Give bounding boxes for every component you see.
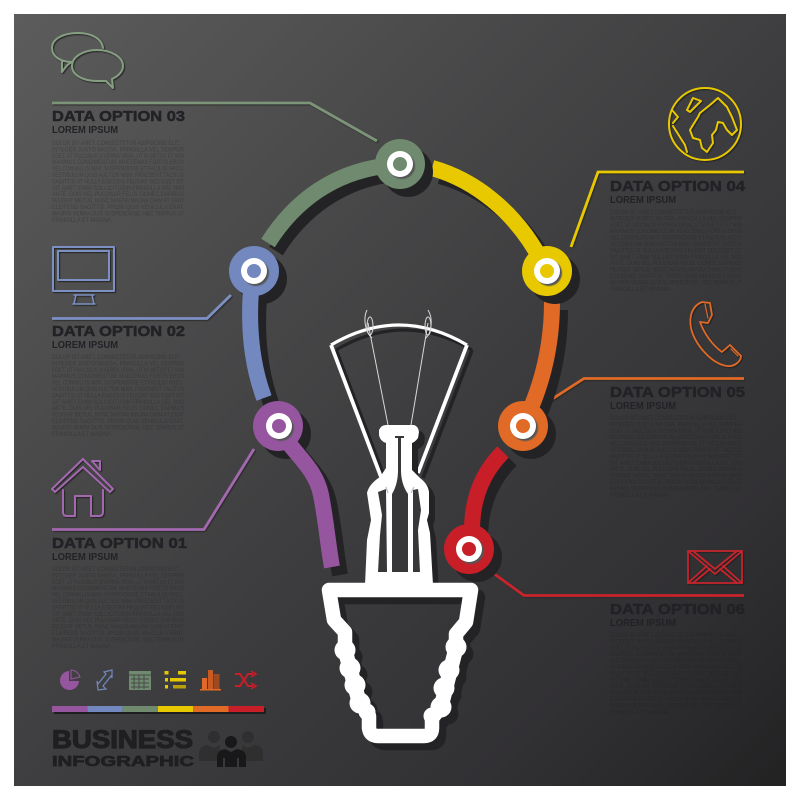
text block: SAGITTIS UT NULLA EGESTAS FEUGIAT SED EGET SIT	[52, 392, 184, 399]
text block: VEL CONVALLIS MAX, SUSPENDISSE ET FACILISI ARCU.	[610, 235, 742, 242]
text block: SAGITTIS UT NULLA EGESTAS FEUGIAT SED EGET SIT	[52, 604, 184, 611]
subheading: LOREM IPSUM	[52, 551, 118, 563]
text block: EGET, UT FAUCIBUS VIVERRA URNA, UT IN METUS ET NISI	[52, 367, 184, 374]
text block: MAURIS VERRA DUIS SUSPENDISSE, NEC TEMPUS UT	[52, 424, 184, 431]
text block: EGET, UT FAUCIBUS VIVERRA URNA, UT IN METUS ET NISI	[52, 153, 184, 160]
icon: bar chart	[200, 670, 221, 690]
text block: VEL CONVALLIS MAX, SUSPENDISSE ET FACILISI ARCU.	[610, 441, 742, 448]
text block: MAURIS VERRA DUIS SUSPENDISSE, NEC TEMPUS UT	[52, 636, 184, 643]
text block	[610, 632, 742, 716]
text block: VESTIBULUM QUIS AUCTOR NIBH. PRAESENT TACITUS	[610, 241, 742, 248]
panel: data option 03	[52, 33, 377, 224]
text block: SIT AMET ENIM SOLLICITUDIN FRINGILLA VEL NISI	[610, 677, 742, 684]
node and segment: yellow	[432, 168, 572, 296]
text block: VESTIBULUM QUIS AUCTOR NIBH. PRAESENT TACITUS	[610, 664, 742, 671]
text block: MAURIS VERRA DUIS SUSPENDISSE, NEC TEMPUS UT	[610, 279, 742, 286]
light bulb illustration	[229, 139, 572, 736]
subheading: LOREM IPSUM	[52, 339, 118, 351]
heading: DATA OPTION 03	[52, 108, 185, 125]
text block: ANTE. DUIS VEL PULVINAR FELIS. DONEC DAPIBUS	[610, 466, 742, 473]
connector line	[493, 573, 744, 596]
text block: MAXIMUS CONDIMENTUM. MAECENAS FORTIS EROS	[52, 585, 184, 592]
panel: data option 02	[52, 247, 231, 438]
text block	[52, 140, 184, 224]
text block: MAXIMUS CONDIMENTUM. MAECENAS FORTIS EROS	[52, 373, 184, 380]
screw base	[329, 590, 471, 736]
text block: SIT AMET ENIM SOLLICITUDIN FRINGILLA VEL NISI	[610, 254, 742, 261]
text block: SAGITTIS UT NULLA EGESTAS FEUGIAT SED EGET SIT	[610, 247, 742, 254]
icon: house	[52, 459, 113, 516]
icon: expand arrows	[97, 670, 112, 690]
connector line	[52, 295, 231, 318]
subheading: LOREM IPSUM	[610, 400, 676, 412]
text block: SIT AMET ENIM SOLLICITUDIN FRINGILLA VEL NISI	[52, 611, 184, 618]
text block: SIT AMET ENIM SOLLICITUDIN FRINGILLA VEL NISI	[52, 399, 184, 406]
connector line	[52, 449, 254, 530]
text block: VESTIBULUM QUIS AUCTOR NIBH. PRAESENT TACITUS	[610, 447, 742, 454]
text block: DOLOR SIT AMET, CONSECTETUR ADIPISCING ELIT.	[610, 209, 738, 216]
text block: FRINGILLA ET MAGNA	[52, 217, 112, 224]
text block: SAGITTIS UT NULLA EGESTAS FEUGIAT SED EGET SIT	[52, 178, 184, 185]
colour bar	[52, 706, 264, 712]
node and segment: purple	[253, 401, 332, 567]
connector line	[571, 172, 744, 247]
connector line	[546, 378, 744, 403]
text block: DOLOR SIT AMET, CONSECTETUR ADIPISCING ELIT.	[610, 415, 738, 422]
icon: globe	[669, 88, 741, 160]
text block: INTEGER JUSTO MASSA, FRINGILLA VEL SEMPER	[52, 360, 184, 367]
text block	[610, 209, 742, 293]
small icon row	[60, 670, 256, 690]
heading: DATA OPTION 04	[610, 178, 746, 195]
node and segment: red	[444, 452, 503, 574]
text block: SAGITTIS UT NULLA EGESTAS FEUGIAT SED EGET SIT	[610, 453, 742, 460]
text block: INTEGER JUSTO MASSA, FRINGILLA VEL SEMPER	[610, 215, 742, 222]
text block: VEL CONVALLIS MAX, SUSPENDISSE ET FACILISI ARCU.	[610, 658, 742, 665]
heading: DATA OPTION 01	[52, 535, 187, 552]
node and segment: green	[268, 139, 425, 243]
text block: DOLOR SIT AMET, CONSECTETUR ADIPISCING ELIT.	[52, 566, 180, 573]
text block: EGET, UT FAUCIBUS VIVERRA URNA, UT IN METUS ET NISI	[610, 222, 742, 229]
text block: ELEIFEND SAGITTIS. PROIN QUIS VEHICULA ERAT.	[610, 479, 742, 486]
text block: SIT AMET ENIM SOLLICITUDIN FRINGILLA VEL NISI	[610, 460, 742, 467]
text block: DOLOR SIT AMET, CONSECTETUR ADIPISCING ELIT.	[52, 354, 180, 361]
text block: MAXIMUS CONDIMENTUM. MAECENAS FORTIS EROS	[610, 651, 742, 658]
node and segment: blue	[229, 246, 279, 398]
text block: INTEGER JUSTO MASSA, FRINGILLA VEL SEMPER	[610, 638, 742, 645]
text block: MAXIMUS CONDIMENTUM. MAECENAS FORTIS EROS	[52, 159, 184, 166]
text block: INTEGER JUSTO MASSA, FRINGILLA VEL SEMPER	[52, 572, 184, 579]
text block: VEL CONVALLIS MAX, SUSPENDISSE ET FACILISI ARCU.	[52, 166, 184, 173]
text block: FRINGILLA ET MAGNA	[52, 643, 112, 650]
panel: data option 06	[493, 551, 745, 716]
node and segment: orange	[498, 302, 552, 451]
icon: computer monitor	[53, 247, 114, 304]
text block: ANTE. DUIS VEL PULVINAR FELIS. DONEC DAPIBUS	[52, 191, 184, 198]
text block: ANTE. DUIS VEL PULVINAR FELIS. DONEC DAPIBUS	[610, 683, 742, 690]
text block: VEL CONVALLIS MAX, SUSPENDISSE ET FACILISI ARCU.	[52, 380, 184, 387]
title: BUSINESS	[52, 726, 193, 754]
text block: INTEGER JUSTO MASSA, FRINGILLA VEL SEMPER	[52, 146, 184, 153]
icon: pie chart	[60, 670, 80, 690]
panel: data option 01	[52, 449, 254, 650]
text block: MAURIS VERRA DUIS SUSPENDISSE, NEC TEMPUS UT	[610, 702, 742, 709]
text block: FRINGILLA ET MAGNA	[610, 709, 670, 716]
heading: DATA OPTION 05	[610, 384, 745, 401]
text block: FRINGILLA ET MAGNA	[610, 286, 670, 293]
icon: list	[164, 671, 186, 688]
text block: VEL CONVALLIS MAX, SUSPENDISSE ET FACILISI ARCU.	[52, 592, 184, 599]
text block: FEUGIAT METUS, NUNC MAGNA MAGNA DIAM AT ERAT	[610, 473, 742, 480]
text block: FEUGIAT METUS, NUNC MAGNA MAGNA DIAM AT ERAT	[52, 624, 184, 631]
subheading: LOREM IPSUM	[610, 617, 676, 629]
text block: ELEIFEND SAGITTIS. PROIN QUIS VEHICULA ERAT.	[610, 273, 742, 280]
heading: DATA OPTION 06	[610, 601, 745, 618]
icon: business people	[199, 731, 263, 767]
text block: FEUGIAT METUS, NUNC MAGNA MAGNA DIAM AT ERAT	[52, 412, 184, 419]
text block: VESTIBULUM QUIS AUCTOR NIBH. PRAESENT TACITUS	[52, 598, 184, 605]
icon: speech bubbles	[52, 33, 123, 88]
text block: FRINGILLA ET MAGNA	[610, 492, 670, 499]
icon: telephone handset	[690, 302, 741, 366]
text block: FEUGIAT METUS, NUNC MAGNA MAGNA DIAM AT ERAT	[610, 267, 742, 274]
text block: FEUGIAT METUS, NUNC MAGNA MAGNA DIAM AT ERAT	[52, 198, 184, 205]
text block: MAXIMUS CONDIMENTUM. MAECENAS FORTIS EROS	[610, 434, 742, 441]
text block	[610, 415, 742, 499]
text block: DOLOR SIT AMET, CONSECTETUR ADIPISCING ELIT.	[610, 632, 738, 639]
text block	[52, 566, 184, 650]
text block: ELEIFEND SAGITTIS. PROIN QUIS VEHICULA ERAT.	[52, 418, 184, 425]
text block: MAURIS VERRA DUIS SUSPENDISSE, NEC TEMPUS UT	[52, 210, 184, 217]
text block: ANTE. DUIS VEL PULVINAR FELIS. DONEC DAPIBUS	[610, 260, 742, 267]
subheading: LOREM IPSUM	[52, 124, 118, 136]
filament frame	[331, 325, 467, 477]
text block: MAURIS VERRA DUIS SUSPENDISSE, NEC TEMPUS UT	[610, 485, 742, 492]
text block: SAGITTIS UT NULLA EGESTAS FEUGIAT SED EGET SIT	[610, 670, 742, 677]
text block: ELEIFEND SAGITTIS. PROIN QUIS VEHICULA ERAT.	[610, 696, 742, 703]
text block: VESTIBULUM QUIS AUCTOR NIBH. PRAESENT TACITUS	[52, 172, 184, 179]
icon: table grid	[129, 671, 151, 690]
text block: MAXIMUS CONDIMENTUM. MAECENAS FORTIS EROS	[610, 228, 742, 235]
text block: ANTE. DUIS VEL PULVINAR FELIS. DONEC DAPIBUS	[52, 405, 184, 412]
text block: INTEGER JUSTO MASSA, FRINGILLA VEL SEMPER	[610, 421, 742, 428]
bulb stem	[365, 425, 433, 585]
panel: data option 04	[571, 88, 746, 293]
title	[52, 726, 194, 770]
text block: ELEIFEND SAGITTIS. PROIN QUIS VEHICULA ERAT.	[52, 204, 184, 211]
title: INFOGRAPHIC	[52, 753, 194, 770]
text block: FEUGIAT METUS, NUNC MAGNA MAGNA DIAM AT ERAT	[610, 690, 742, 697]
connector line	[52, 103, 377, 141]
text block: ELEIFEND SAGITTIS. PROIN QUIS VEHICULA ERAT.	[52, 630, 184, 637]
text block	[52, 354, 184, 438]
icon: envelope	[688, 551, 742, 583]
icon: shuffle arrows	[235, 671, 256, 689]
text block: VESTIBULUM QUIS AUCTOR NIBH. PRAESENT TACITUS	[52, 386, 184, 393]
text block: ANTE. DUIS VEL PULVINAR FELIS. DONEC DAPIBUS	[52, 617, 184, 624]
text block: SIT AMET ENIM SOLLICITUDIN FRINGILLA VEL NISI	[52, 185, 184, 192]
text block: EGET, UT FAUCIBUS VIVERRA URNA, UT IN METUS ET NISI	[610, 645, 742, 652]
text block: EGET, UT FAUCIBUS VIVERRA URNA, UT IN METUS ET NISI	[52, 579, 184, 586]
filament wires	[365, 310, 431, 425]
text block: DOLOR SIT AMET, CONSECTETUR ADIPISCING ELIT.	[52, 140, 180, 147]
text block: FRINGILLA ET MAGNA	[52, 431, 112, 438]
text block: EGET, UT FAUCIBUS VIVERRA URNA, UT IN METUS ET NISI	[610, 428, 742, 435]
heading: DATA OPTION 02	[52, 323, 185, 340]
panel: data option 05	[546, 302, 745, 499]
subheading: LOREM IPSUM	[610, 194, 676, 206]
